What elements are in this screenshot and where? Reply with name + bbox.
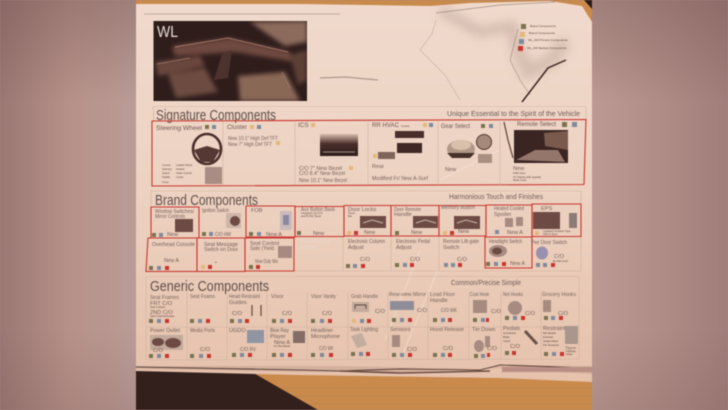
row 2 generic items: Pre Tensioner: [543, 343, 559, 347]
row 1 brand items: C/O HW: [215, 232, 232, 238]
row 2 generic items: Tie Down: [472, 327, 495, 333]
row 2 generic items: Head: [566, 352, 573, 356]
row 2 generic items: C/O: [443, 346, 454, 352]
row 1 generic items: Visor Vanity: [311, 294, 336, 300]
row 1 brand items: Heated Cooled: [494, 206, 524, 212]
row 2 generic items: C/O: [407, 347, 418, 353]
row 2 generic items: Belt Buckle: [543, 331, 557, 335]
row 1 generic items: FRT C/O: [150, 301, 173, 307]
photo label: WL: WL: [157, 24, 178, 41]
row 2 generic items: C/O: [510, 344, 521, 350]
row 1 generic items: C/O: [558, 311, 569, 317]
item: ICS: [298, 122, 358, 184]
panel: generic components: [146, 276, 579, 360]
item: cluster: [227, 124, 280, 148]
row 2 generic items: Clutch: [503, 339, 511, 343]
row 1 generic items: C/O WK: [441, 308, 457, 314]
row 1 brand items: New A: [266, 232, 282, 238]
row 2 generic items: New A: [274, 340, 290, 346]
item: ICS: New 10.1" New Bezel: [299, 178, 347, 184]
item: steering wheel: Cruise: [176, 175, 184, 179]
panel: signature components: [152, 106, 586, 186]
item: gear select: New: [445, 167, 457, 173]
item: RR HVAC: Rear: [372, 164, 384, 170]
row 2 generic items: Brake: [503, 335, 510, 339]
row 2 brand items: New A: [164, 258, 179, 264]
row 2 brand items: New A: [510, 261, 525, 267]
row 2 brand items: Electronic Pedal: [396, 239, 430, 245]
row 1 brand items: and Rr Rst Tourer: [301, 214, 322, 218]
row 2 brand items: New Duty Mix: [255, 259, 278, 265]
row 1 generic items: Rear-view Mirror: [389, 292, 426, 298]
row 2 generic items: C/O: [153, 348, 164, 354]
row 1 generic items: C/O: [282, 311, 293, 317]
item: RR HVAC: RR HVAC: [372, 122, 399, 129]
row 1 brand items: EPS: [541, 206, 552, 212]
row 2 brand items: C/O: [410, 257, 421, 263]
item: steering wheel: Control: [162, 163, 171, 167]
tagline: brand: Harmonious Touch and Finishes: [449, 192, 543, 201]
row 2 brand items: Adjust: [300, 245, 316, 251]
item: remote select: ASM Conn: [513, 171, 526, 175]
tagline: signature: Unique Essential to the Spirit of the Vehicle: [447, 109, 580, 118]
row 2 brand items: Seat Message: [204, 242, 238, 248]
row 2 brand items: w: [215, 261, 217, 264]
row 1 generic items: Head Restraint: [229, 294, 260, 300]
row 1 brand items: Window Switches/: [155, 209, 194, 215]
row 2 generic items: C/O WI: [319, 346, 333, 352]
item: ICS: ICS: [298, 122, 309, 129]
row 2 generic items: Microphone: [311, 334, 340, 340]
panel: brand components: [146, 191, 581, 272]
row 2 brand items: Seat Control: [250, 241, 279, 247]
row 2 brand items: [149, 239, 568, 270]
row 1 brand items: Handle: [394, 212, 412, 218]
red frame: signature: [152, 120, 586, 186]
row 2 generic items: Height Adjust: [543, 339, 559, 343]
item: cluster: New 7" High Def TFT: [228, 142, 272, 148]
row 1 generic items: 2ND C/O: [150, 310, 173, 316]
row 1 brand items: New: [313, 231, 325, 237]
torn printed sheet: [136, 0, 592, 382]
row 1 generic items: Grocery Hooks: [542, 292, 576, 298]
row 1 brand items: New: [167, 232, 179, 238]
row 1 generic items: C/O: [491, 309, 502, 315]
row 1 generic items: Handle: [430, 298, 448, 304]
row 1 brand items: Memory Button: [441, 205, 475, 211]
row 1 generic items: Seat Frames: [150, 295, 179, 301]
row 1 generic items: Seat Cushion: [150, 305, 166, 309]
dark object in lower left corner: [136, 371, 318, 410]
row 1 brand items: Mirror Controls: [155, 214, 185, 220]
item: remote select: New: [513, 166, 525, 172]
item: remote select: Remote Select: [517, 121, 556, 128]
row 2 brand items: C/O: [360, 257, 371, 263]
red frames: brand: [146, 204, 581, 272]
row 1 brand items: New: [458, 229, 470, 235]
row 2 brand items: Remote Lift-gate: [443, 239, 479, 245]
row 1 generic items: C/O: [417, 308, 428, 314]
row 2 brand items: Adjust: [348, 245, 364, 251]
row 1 generic items: Coat Hook: [470, 292, 489, 298]
row 2 generic items: Extender: [543, 335, 554, 339]
item: cluster: New 10.1" High Def TFT: [228, 136, 278, 142]
legend: Brand Components: [529, 31, 555, 35]
row 2 generic items: Sensors: [390, 327, 411, 333]
row 2 generic items: Hood Release: [430, 327, 464, 333]
item: steering wheel: Steering: [162, 167, 172, 171]
item: steering wheel: [156, 125, 222, 184]
row 2 generic items: Media Ports: [190, 328, 215, 334]
item: RR HVAC: [372, 122, 433, 182]
row 2 brand items: C/O: [457, 257, 468, 263]
photo: WL interior: [154, 21, 307, 101]
row 1 generic items: [149, 292, 576, 323]
item: remote select: [513, 121, 577, 182]
row 1 generic items: Net Hooks: [503, 292, 523, 298]
row 1 brand items: New A: [507, 230, 523, 236]
row 2 generic items: Accelerator: [503, 331, 516, 335]
row 1 generic items: Visor: [271, 294, 284, 300]
row 2 generic items: Headliner: [311, 328, 333, 334]
row 1 generic items: C/O: [525, 311, 536, 317]
item: steering wheel: Paddle: [162, 175, 171, 179]
legend: WL_AM Primary Components: [528, 38, 568, 42]
item: steering wheel: Leather Wood: [176, 163, 193, 167]
row 1 brand items: Integrates into ICS: [301, 211, 323, 215]
heading: generic components: Generic Components: [150, 278, 269, 295]
row 1 generic items: C/O: [322, 311, 333, 317]
row 1 brand items: Touch: [348, 211, 355, 215]
item: steering wheel: Audio Control: [176, 171, 192, 175]
item: steering wheel: Switch: [162, 171, 170, 175]
row 1 brand items: Ignition Switch: [202, 208, 229, 214]
item: gear select: Gear Select: [441, 123, 470, 130]
row 2 brand items: Adjust: [396, 245, 412, 251]
item: RR HVAC: Modified Fr/ New A-Surf: [372, 176, 428, 182]
row 2 generic items: Tippet: [565, 345, 577, 350]
row 2 brand items: Electronic Column: [348, 239, 385, 245]
row 1 generic items: Load Floor: [430, 292, 455, 298]
row 1 brand items: Door Locks: [348, 207, 376, 213]
tagline: generic: Common/Precise Simple: [451, 278, 521, 287]
row 2 generic items: Blue Ray: [270, 328, 289, 334]
row 1 brand items: Updated Urethane Type: [543, 229, 571, 233]
row 2 generic items: Pedals: [503, 326, 520, 332]
legend: [518, 24, 568, 51]
row 2 brand items: Electronic Seat: [300, 239, 330, 245]
row 2 generic items: C/O RV: [240, 347, 256, 353]
row 1 brand items: Shift & Sport: [543, 232, 558, 236]
item: ICS: C/O 8.4" New Bezel: [299, 171, 345, 177]
row 2 generic items: Task Lighting: [350, 327, 378, 333]
row 1 brand items: FOB: [251, 208, 263, 214]
row 2 generic items: Restraints: [543, 326, 568, 332]
item: ICS: C/O 7" New Bezel: [299, 166, 342, 172]
row 1 generic items: Seat Cushion/Design: [150, 314, 175, 318]
row 1 generic items: Seat Foams: [190, 294, 215, 300]
item: steering wheel: Steering Wheel: [156, 125, 202, 132]
item: remote select: Air Display shift upgrade: [513, 175, 542, 179]
row 2 brand items: C/O: [554, 254, 565, 260]
item: steering wheel: Heated: [176, 167, 185, 171]
item: remote select: Mode Knob: [513, 178, 527, 182]
row 1 brand items: Aux Button Bank: [301, 207, 335, 213]
row 2 generic items: [149, 326, 578, 358]
row 2 brand items: Overhead Console: [152, 242, 195, 248]
item: gear select: [441, 123, 493, 173]
row 1 generic items: C/O: [232, 311, 243, 317]
row 1 generic items: Grab Handle: [351, 294, 378, 300]
heading: brand components: Brand Components: [155, 192, 258, 209]
row 2 generic items: C/O: [200, 347, 211, 353]
row 2 brand items: Pwr Door Switch: [531, 240, 567, 246]
wooden table background: [136, 0, 592, 410]
row 2 generic items: for New Bezel: [274, 344, 291, 348]
row 2 brand items: Headlight Switch: [489, 239, 522, 245]
legend: WL_AM Backup Components: [527, 46, 567, 50]
row 2 generic items: Highway: [566, 349, 577, 353]
row 1 brand items: Bar: [348, 214, 352, 218]
row 2 generic items: Power Outlet: [150, 328, 180, 334]
item: steering wheel: Cover: [162, 180, 169, 184]
legend: Brand Components: [530, 24, 556, 28]
row 2 brand items: Side (Yield: [250, 246, 274, 252]
row 2 generic items: Player: [270, 334, 286, 340]
row 2 generic items: UGDO: [229, 328, 246, 334]
row 1 brand items: Spoiler: [494, 212, 512, 218]
row 2 generic items: C/O: [487, 346, 498, 352]
row 2 brand items: Switch: [443, 245, 459, 251]
row 1 brand items: Door Remote: [394, 207, 421, 213]
row 2 brand items: Switch on Door: [204, 247, 238, 253]
row 1 brand items: New: [411, 230, 423, 236]
row 1 generic items: C/O: [375, 309, 386, 315]
item: cluster: Cluster: [227, 124, 248, 131]
row 1 brand items: [152, 205, 577, 238]
row 1 generic items: Guides: [229, 300, 247, 306]
row 2 brand items: By Mid Level: [553, 259, 568, 263]
heading: signature components: Signature Components: [156, 107, 276, 124]
item: RR HVAC: Control: [401, 124, 410, 128]
row 1 brand items: New: [364, 230, 376, 236]
paper creases and tear: [320, 10, 566, 360]
